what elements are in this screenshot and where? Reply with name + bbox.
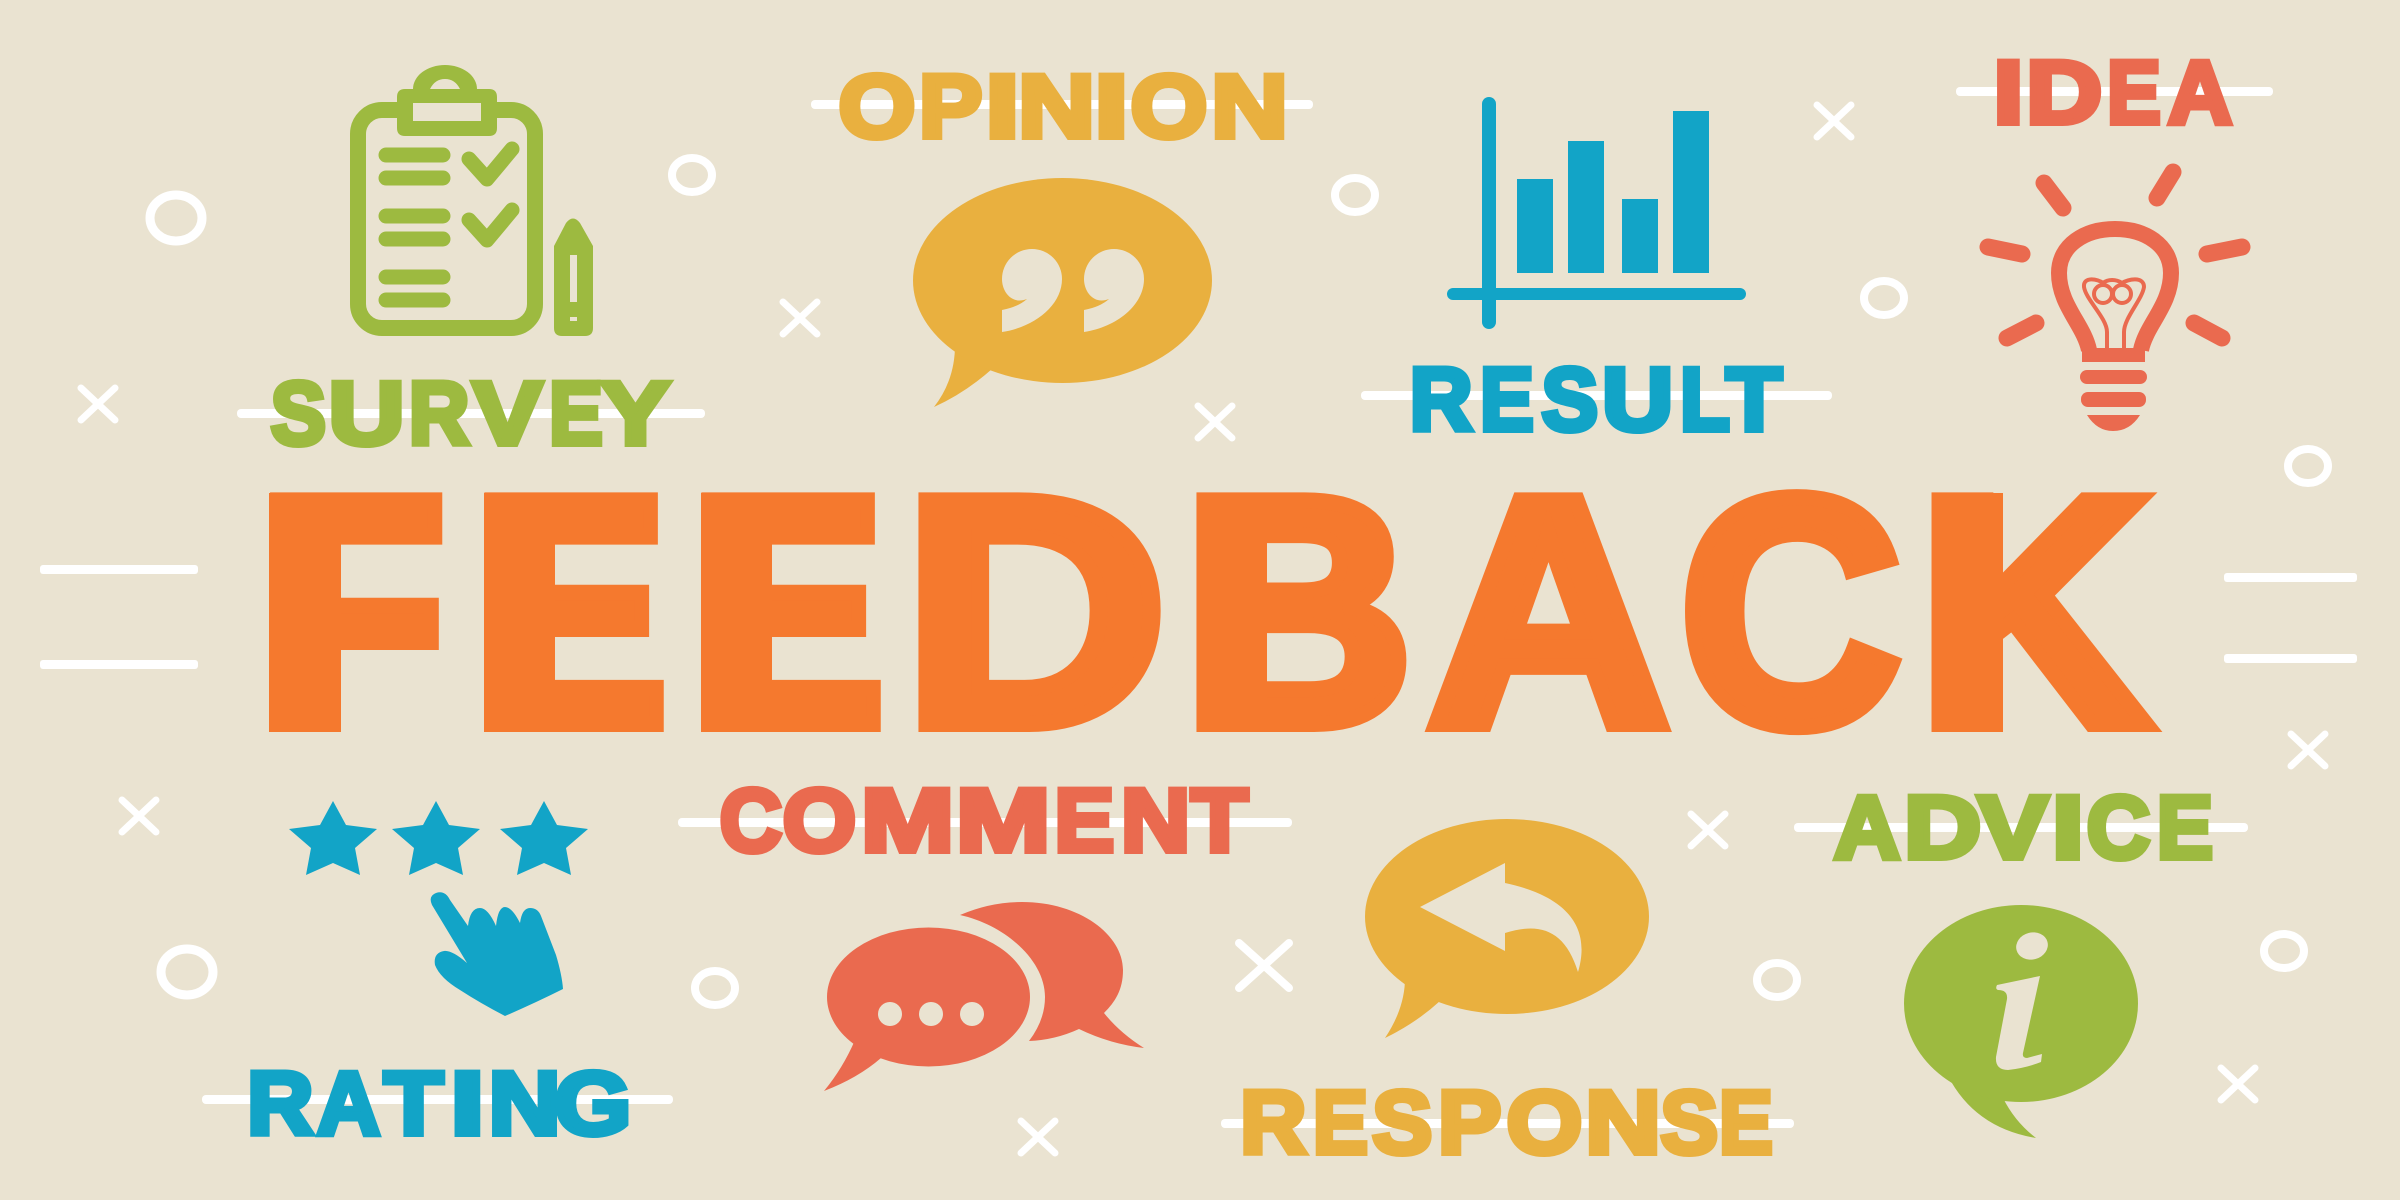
label: SURVEY: Y [601, 363, 670, 463]
label: RATING: I [450, 1053, 484, 1153]
title: FEEDBACK: F [257, 430, 446, 793]
label: OPINION: N [1018, 56, 1095, 156]
bar chart: result icon [1447, 97, 1746, 329]
icon: comment speech bubbles [824, 902, 1144, 1091]
label: RESPONSE: P [1438, 1072, 1501, 1172]
label: COMMENT: M [861, 770, 954, 870]
icon: survey clipboard with pencil [358, 65, 593, 336]
label: RESULT: L [1680, 349, 1730, 449]
label: ADVICE [1794, 777, 2248, 877]
label: OPINION: P [919, 56, 982, 156]
label: OPINION: I [986, 56, 1019, 156]
label: COMMENT: M [956, 770, 1050, 870]
label: RESULT [1361, 349, 1832, 449]
title: FEEDBACK: A [1428, 430, 1669, 793]
label: SURVEY: E [549, 363, 603, 463]
label: SURVEY [237, 363, 705, 463]
label: IDEA: A [2168, 42, 2232, 142]
label: IDEA: D [2026, 42, 2102, 142]
label: RESPONSE: S [1372, 1072, 1432, 1172]
icon: three rating stars [289, 801, 588, 875]
label: COMMENT: O [783, 770, 856, 870]
label: RESPONSE: S [1660, 1072, 1718, 1172]
label: IDEA: I [1994, 42, 2023, 142]
label: OPINION: O [1131, 56, 1207, 156]
label: RESPONSE: N [1585, 1072, 1661, 1172]
label: SURVEY: R [409, 363, 469, 463]
icon: light bulb with rays [1988, 172, 2242, 431]
label: ADVICE: C [2087, 777, 2150, 877]
label: OPINION: N [1211, 56, 1288, 156]
label: RESULT: S [1542, 349, 1598, 449]
label: RATING: T [384, 1053, 443, 1153]
label: SURVEY: S [271, 363, 326, 463]
label: ADVICE: A [1834, 777, 1900, 877]
label: RESPONSE: E [1313, 1072, 1368, 1172]
label: RATING: N [489, 1053, 560, 1153]
label: ADVICE: D [1904, 777, 1981, 877]
label: ADVICE: I [2052, 777, 2084, 877]
label: COMMENT: E [1054, 770, 1114, 870]
icon: opinion speech bubble with quotes [913, 178, 1212, 407]
label: RATING: R [247, 1053, 313, 1153]
label: RESPONSE [1221, 1072, 1794, 1172]
icon: advice speech bubble with information mark [1904, 905, 2138, 1138]
label: COMMENT: N [1121, 770, 1190, 870]
label: OPINION: O [839, 56, 915, 156]
label: RESULT: R [1410, 349, 1472, 449]
label: OPINION: I [1094, 56, 1128, 156]
title: FEEDBACK: E [689, 430, 885, 793]
label: RATING: G [555, 1053, 631, 1153]
label: ADVICE: V [1978, 777, 2048, 877]
title: FEEDBACK [257, 430, 2149, 793]
title: FEEDBACK: B [1183, 430, 1413, 793]
title: FEEDBACK: D [903, 430, 1167, 793]
label: RESULT: T [1726, 349, 1782, 449]
label: COMMENT: C [720, 770, 782, 870]
title: FEEDBACK: C [1680, 430, 1901, 793]
label: COMMENT [678, 770, 1292, 870]
label: RESPONSE: E [1719, 1072, 1773, 1172]
label: RESPONSE: R [1240, 1072, 1306, 1172]
label: RESULT: U [1602, 349, 1673, 449]
label: RESPONSE: O [1507, 1072, 1582, 1172]
label: SURVEY: V [473, 363, 542, 463]
label: ADVICE: E [2157, 777, 2213, 877]
icon: pointing hand [431, 892, 563, 1016]
label: IDEA: E [2107, 42, 2161, 142]
title: FEEDBACK: K [1918, 430, 2149, 793]
icon: response speech bubble with reply arrow [1365, 819, 1649, 1038]
label: RATING: A [317, 1053, 380, 1153]
title: FEEDBACK: E [472, 430, 668, 793]
label: COMMENT: T [1191, 770, 1248, 870]
label: RATING [202, 1053, 673, 1153]
label: RESULT: E [1480, 349, 1534, 449]
label: OPINION [811, 56, 1313, 156]
label: SURVEY: U [329, 363, 404, 463]
label: IDEA [1956, 42, 2273, 142]
